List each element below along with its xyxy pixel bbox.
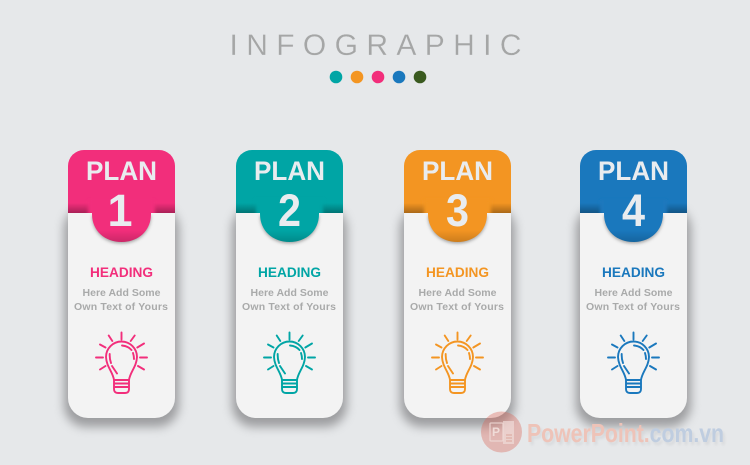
plan label: PLAN [86, 156, 157, 186]
icon: light bulb [432, 332, 483, 393]
title: INFOGRAPHIC [230, 29, 522, 62]
body text: Here Add Some [594, 287, 673, 299]
icon: light bulb [608, 332, 659, 393]
panel: plan 3 [400, 150, 515, 427]
heading: HEADING [258, 264, 321, 280]
plan label: PLAN [254, 156, 325, 186]
plan label: PLAN [422, 156, 493, 186]
icon: light bulb [264, 332, 315, 393]
icon: watermark logo: P [492, 425, 500, 439]
body text: Here Add Some [82, 287, 161, 299]
panel: plan 2 [232, 150, 347, 427]
body text: Own Text of Yours [74, 301, 168, 313]
heading: HEADING [602, 264, 665, 280]
body text [410, 287, 504, 313]
icon: light bulb [96, 332, 147, 393]
body text [74, 287, 168, 313]
body text [242, 287, 336, 313]
body text: Own Text of Yours [242, 301, 336, 313]
body text: Own Text of Yours [586, 301, 680, 313]
plan number: 2 [278, 185, 301, 236]
heading: HEADING [426, 264, 489, 280]
body text: Here Add Some [418, 287, 497, 299]
heading: HEADING [90, 264, 153, 280]
plan number: 3 [446, 185, 469, 236]
body text: Here Add Some [250, 287, 329, 299]
body text [586, 287, 680, 313]
panel: plan 1 [64, 150, 179, 427]
plan number: 1 [107, 185, 133, 236]
icon: watermark logo [481, 412, 522, 452]
body text: Own Text of Yours [410, 301, 504, 313]
panel: plan 4 [576, 150, 691, 427]
colour dots [330, 71, 426, 83]
plan number: 4 [622, 185, 645, 236]
plan label: PLAN [598, 156, 669, 186]
watermark [481, 412, 726, 452]
watermark: PowerPoint.com.vn [527, 418, 724, 448]
